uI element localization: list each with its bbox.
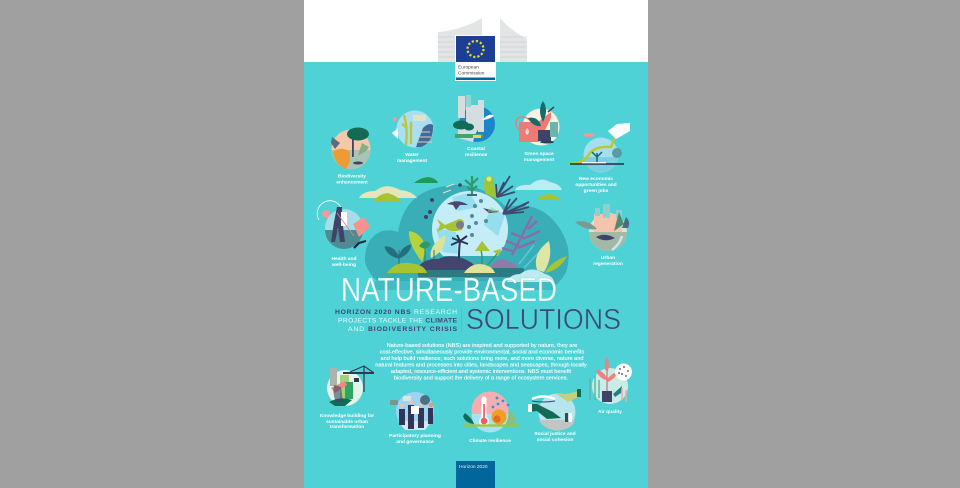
icon: social justice [528,389,581,430]
icon: water management [392,110,434,148]
icon: coastal resilience [453,95,495,142]
label: water management: Water [405,152,419,158]
divider [460,307,463,332]
left leaf cluster [409,231,426,262]
label: new economic opportunities and green jobs: New economic [579,176,613,182]
footer box: Horizon 2020 [456,461,495,488]
parrot [484,176,497,199]
icon: European Commission logo: Commission [458,70,485,76]
icon: European Commission logo: European [458,64,479,70]
icon: health and well-being [317,201,370,249]
icon: climate resilience [463,392,520,433]
label: social justice: Social justice and [534,431,576,437]
left plant [385,245,411,266]
label: green space management: management [524,157,554,163]
blue grass [519,245,541,268]
subtitle [335,309,457,333]
title: Solutions: SOLUTIONS [466,304,621,336]
label: social justice: social cohesion [537,437,573,443]
subtitle: PROJECTS TACKLE THE CLIMATE [338,318,457,324]
large right leaves [536,241,550,272]
light green mounds [387,263,427,273]
palm leaves [496,176,515,197]
label: biodiversity enhancement: enhancement [336,180,368,186]
mushroom plant [481,250,497,268]
label: new economic opportunities and green jobs: green jobs [584,188,609,194]
ground strip [418,268,524,277]
purple fern [502,216,540,255]
body paragraph: and help build resilience; such solutions bring more, and more diverse, nature and [380,356,584,362]
label: participatory planning: and governance [396,439,434,445]
fish [437,219,464,232]
footer box: Horizon 2020: Horizon 2020 [459,464,488,470]
title: Nature-based: NATURE-BASED [341,271,557,308]
icon: green space management [516,101,560,146]
label: knowledge building: Knowledge building for [320,413,374,419]
body paragraph: adapted, resource-efficient and systemic interventions. NBS must benefit [391,369,572,375]
icon: participatory planning [390,392,434,430]
body paragraph: Nature-based solutions (NBS) are inspired and supported by nature, they are [387,343,577,349]
purple mound [490,259,518,268]
label: green space management: Green space [524,151,554,157]
label: health and well-being: Health and [331,256,357,262]
icon: new economic opportunities [570,123,630,172]
manta ray [447,201,468,210]
footprints [467,199,488,237]
label: knowledge building: transformation [330,424,364,430]
dark mound [415,256,478,270]
icon: biodiversity enhancement [331,128,370,170]
label: water management: management [397,158,427,164]
label: climate resilience: Climate resilience [469,438,511,444]
label: coastal resilience: resilience [465,152,488,158]
icon: air quality [590,357,632,404]
sprout on globe [465,176,478,194]
icon: knowledge building [327,366,374,406]
clouds [359,186,417,198]
icon: European Commission logo [438,18,527,81]
label: health and well-being: well-being [331,262,356,268]
label: coastal resilience: Coastal [467,146,485,152]
label: biodiversity enhancement: Biodiversity [338,174,366,180]
body paragraph: biodiversity and support the delivery of a range of ecosystem services. [394,376,568,382]
bees [424,183,462,219]
label: urban regeneration: regeneration [593,261,623,267]
label: urban regeneration: Urban [601,255,615,261]
icon: urban regeneration [575,204,629,251]
subtitle: HORIZON 2020 NBS RESEARCH [335,309,457,316]
palm tree [451,235,468,258]
lower band behind title [375,281,555,290]
illustration: central globe scene [359,176,569,290]
label: participatory planning: Participatory planning [389,433,441,439]
label: air quality: Air quality [598,409,622,415]
globe [432,191,508,256]
body paragraph: cost-effective, simultaneously provide environmental, social and economic benefits [380,350,584,356]
label: knowledge building: sustainable urban [326,419,368,425]
label: new economic opportunities and green jobs: opportunities and [575,182,617,188]
subtitle: AND BIODIVERSITY CRISIS [348,326,457,333]
teal hill background [365,185,569,290]
body paragraph: natural features and processes into cities, landscapes and seascapes, through locally [375,362,587,368]
